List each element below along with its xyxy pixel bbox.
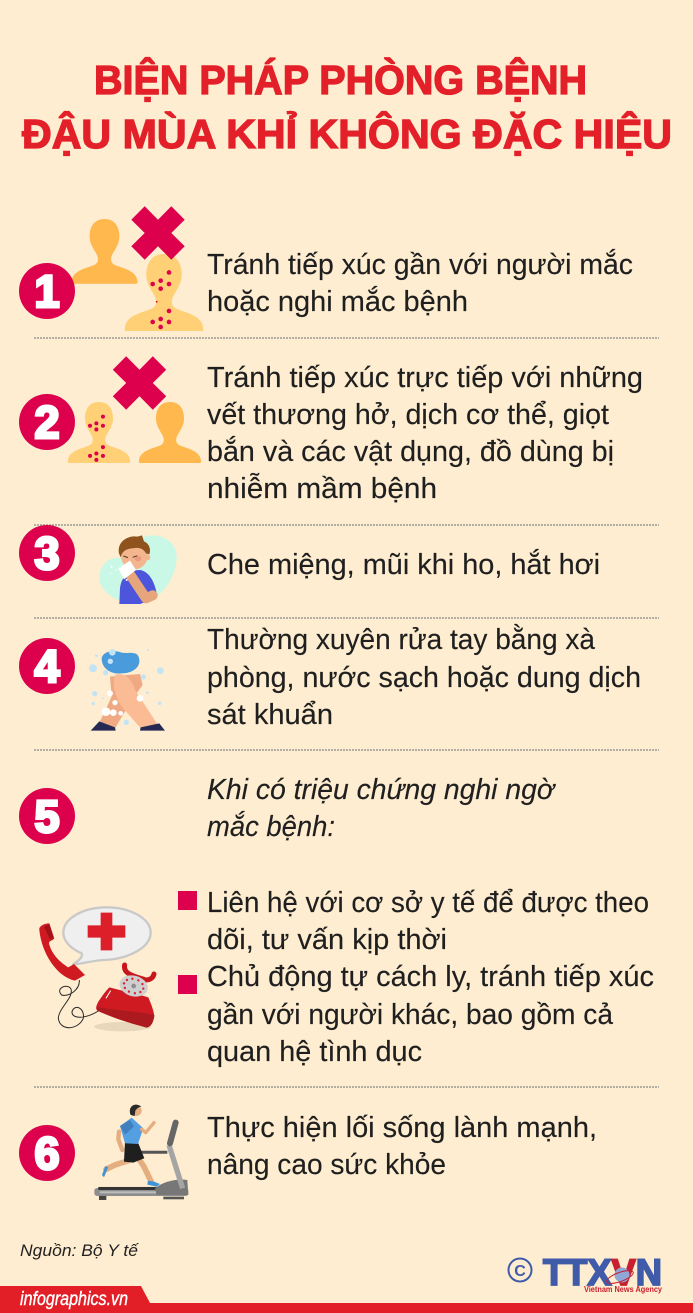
- number badge 6: [19, 1125, 75, 1181]
- number badge 1: 1: [34, 266, 60, 317]
- icon: man running on treadmill: [94, 1105, 188, 1200]
- footer bar: infographics.vn: [20, 1289, 128, 1310]
- number badge 3: 3: [34, 528, 60, 579]
- text: step 1: Tránh tiếp xúc gần với người mắc: [207, 248, 633, 281]
- bullet 1: dõi, tư vấn kịp thời: [207, 924, 447, 956]
- icon: red telephone with medical speech bubble: [39, 907, 154, 1031]
- title: [22, 57, 672, 157]
- step 6: [19, 1105, 597, 1200]
- step 2: [19, 356, 643, 505]
- number badge 4: [19, 638, 75, 694]
- text: step 2: vết thương hở, dịch cơ thể, giọt: [207, 399, 609, 431]
- text: step 2: nhiễm mầm bệnh: [207, 472, 437, 505]
- copyright symbol: [508, 1258, 532, 1282]
- text: step 2: bắn và các vật dụng, đồ dùng bị: [207, 435, 614, 468]
- number badge 5: [19, 788, 75, 844]
- footer bar: [0, 1286, 693, 1313]
- text: step 5 heading: Khi có triệu chứng nghi ngờ: [207, 774, 556, 806]
- text: step 6: Thực hiện lối sống lành mạnh,: [207, 1112, 597, 1144]
- number badge 5: 5: [34, 791, 60, 842]
- step 1: [19, 206, 633, 331]
- text: step 1: hoặc nghi mắc bệnh: [207, 285, 468, 318]
- number badge 4: 4: [34, 641, 60, 692]
- bullet 1: Liên hệ với cơ sở y tế để được theo: [207, 887, 649, 919]
- icon: healthy person: [139, 402, 201, 463]
- text: step 2: Tránh tiếp xúc trực tiếp với những: [207, 362, 643, 394]
- title: BIỆN PHÁP PHÒNG BỆNH: [94, 57, 587, 103]
- copyright symbol: C: [514, 1263, 526, 1280]
- icon: sick person: [68, 402, 130, 463]
- icon: cross mark: [131, 206, 185, 260]
- step 4: [19, 623, 641, 731]
- icon: boy sneezing into tissue: [99, 535, 177, 604]
- text: step 6: nâng cao sức khỏe: [207, 1149, 446, 1181]
- bullet 1: [178, 887, 649, 956]
- step 5: [19, 774, 654, 1068]
- text: step 3: Che miệng, mũi khi ho, hắt hơi: [207, 548, 600, 581]
- text: step 4: phòng, nước sạch hoặc dung dịch: [207, 662, 641, 694]
- number badge 1: [19, 263, 75, 319]
- TTXVN logo: TTXVN: [543, 1252, 662, 1293]
- source note: Nguồn: Bộ Y tế: [20, 1241, 140, 1260]
- bullet 2: quan hệ tình dục: [207, 1036, 422, 1068]
- text: step 4: sát khuẩn: [207, 699, 333, 731]
- number badge 3: [19, 525, 75, 581]
- bullet 2: [178, 961, 654, 1068]
- icon: hands washing with soap sponge: [89, 649, 165, 731]
- number badge 2: [19, 394, 75, 450]
- number badge 2: 2: [34, 397, 60, 448]
- icon: sick person: [125, 254, 203, 331]
- icon: cross mark: [113, 356, 166, 410]
- text: step 5 heading: mắc bệnh:: [207, 810, 335, 843]
- bullet 2: gần với người khác, bao gồm cả: [207, 999, 614, 1031]
- step 3: [19, 525, 600, 604]
- text: step 2: [207, 362, 643, 505]
- text: step 4: Thường xuyên rửa tay bằng xà: [207, 623, 596, 656]
- text: step 6: [207, 1112, 597, 1181]
- bullet 2: Chủ động tự cách ly, tránh tiếp xúc: [207, 961, 654, 993]
- title: ĐẬU MÙA KHỈ KHÔNG ĐẶC HIỆU: [22, 111, 672, 157]
- text: step 4: [207, 623, 641, 731]
- number badge 6: 6: [34, 1128, 60, 1179]
- TTXVN logo: Vietnam News Agency: [584, 1285, 663, 1294]
- text: step 5 heading: [207, 774, 556, 843]
- icon: healthy person: [72, 219, 137, 284]
- text: step 1: [207, 248, 633, 318]
